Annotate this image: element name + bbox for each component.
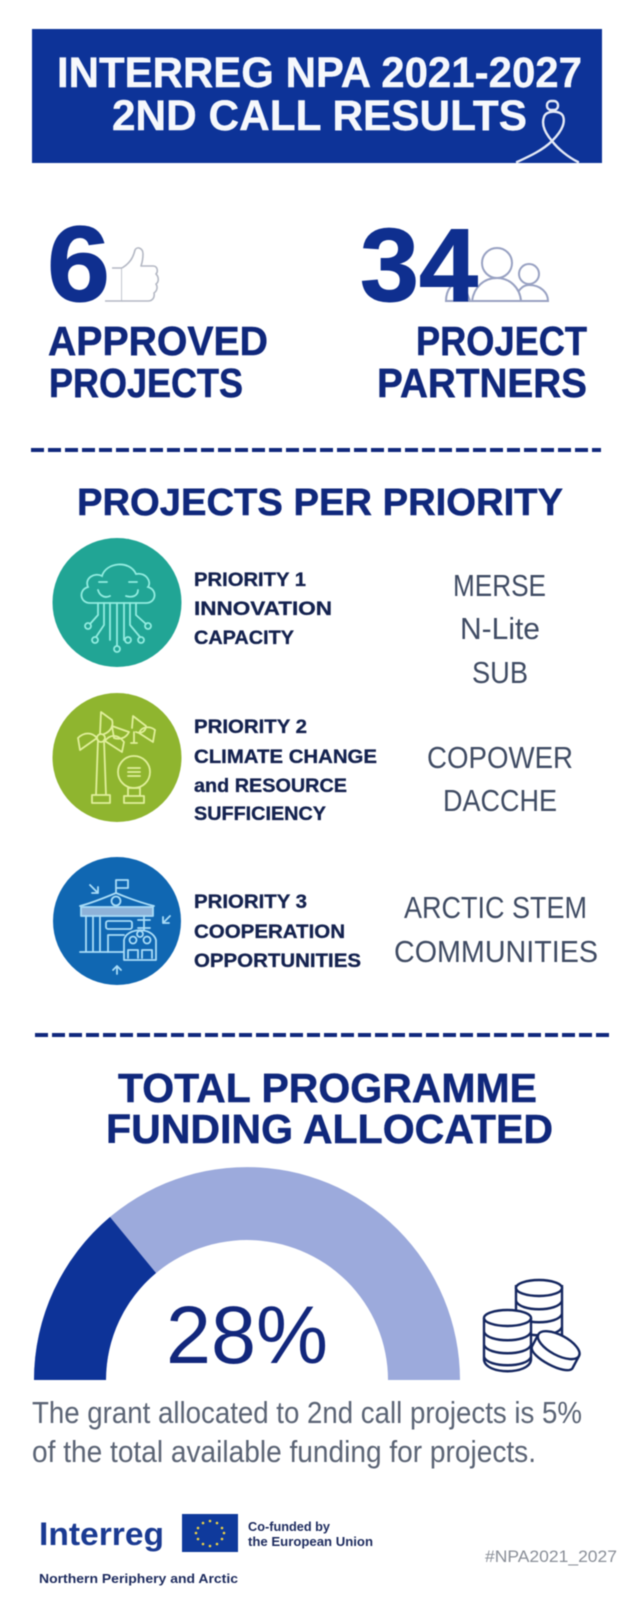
priority label (194, 570, 332, 649)
icon: ribbon (517, 101, 578, 162)
heading: total programme funding: TOTAL PROGRAMME (118, 1065, 537, 1111)
stat label (377, 318, 587, 406)
stat label: PARTNERS (377, 360, 587, 406)
icon: wind turbines and bulb (52, 693, 182, 822)
priority label: OPPORTUNITIES (194, 951, 361, 972)
stat label: PROJECT (416, 318, 587, 364)
project names (453, 568, 546, 690)
project names: N-Lite (460, 611, 540, 646)
project names: ARCTIC STEM (404, 890, 587, 925)
gauge value: 28% (166, 1290, 328, 1381)
priority label: PRIORITY 1 (194, 570, 306, 591)
logo: Interreg: Interreg (39, 1516, 164, 1552)
stat label: PROJECTS (49, 360, 243, 406)
heading: projects per priority: PROJECTS PER PRIORITY (77, 482, 563, 524)
priority label: CAPACITY (194, 628, 294, 649)
project names: COPOWER (427, 740, 573, 775)
stat: approved projects (47, 203, 268, 406)
stat label: APPROVED (48, 318, 268, 364)
project names (427, 740, 573, 818)
project names: COMMUNITIES (394, 934, 598, 969)
heading: total programme funding: FUNDING ALLOCATED (106, 1106, 553, 1152)
text block: grant note: The grant allocated to 2nd call projects is 5% (32, 1395, 582, 1430)
EU funding text (248, 1519, 373, 1549)
priority label (194, 892, 361, 972)
priority label: PRIORITY 2 (194, 717, 307, 738)
text block: grant note (32, 1395, 582, 1469)
stat label (48, 318, 268, 406)
logo: Interreg (39, 1516, 238, 1586)
title: 2ND CALL RESULTS (112, 92, 527, 140)
panel: title banner (32, 29, 602, 163)
number 6: 6 (47, 203, 110, 324)
project names: SUB (472, 655, 528, 690)
priority label: INNOVATION (194, 599, 332, 620)
logo: EU flag (182, 1514, 373, 1552)
priority label: SUFFICIENCY (194, 804, 326, 825)
text block: grant note: of the total available funding for projects. (32, 1434, 536, 1469)
chart: funding gauge (34, 1167, 460, 1381)
icon: cloud circuit (52, 538, 182, 667)
logo subtitle: Northern Periphery and Arctic (39, 1571, 238, 1586)
priority label: PRIORITY 3 (194, 892, 307, 913)
project names: DACCHE (443, 783, 557, 818)
heading: total programme funding (106, 1065, 553, 1152)
priority label: CLIMATE CHANGE (194, 747, 377, 768)
icon: building and community (53, 857, 181, 985)
EU funding text: Co-funded by (248, 1519, 331, 1534)
panel: priority 1 (52, 538, 546, 690)
priority label: and RESOURCE (194, 776, 347, 797)
title (57, 49, 582, 140)
priority label (194, 717, 377, 825)
EU funding text: the European Union (248, 1534, 373, 1549)
title: INTERREG NPA 2021-2027 (57, 49, 582, 97)
icon: thumbs up (105, 248, 158, 301)
number 34: 34 (360, 208, 478, 324)
stat: project partners (360, 208, 587, 406)
project names (394, 890, 598, 969)
project names: MERSE (453, 568, 546, 603)
panel: priority 3 (53, 857, 598, 985)
icon: coins (484, 1280, 584, 1375)
priority label: COOPERATION (194, 922, 345, 943)
hashtag: #NPA2021_2027 (485, 1547, 617, 1566)
icon: people (446, 248, 548, 301)
panel: priority 2 (52, 693, 573, 825)
